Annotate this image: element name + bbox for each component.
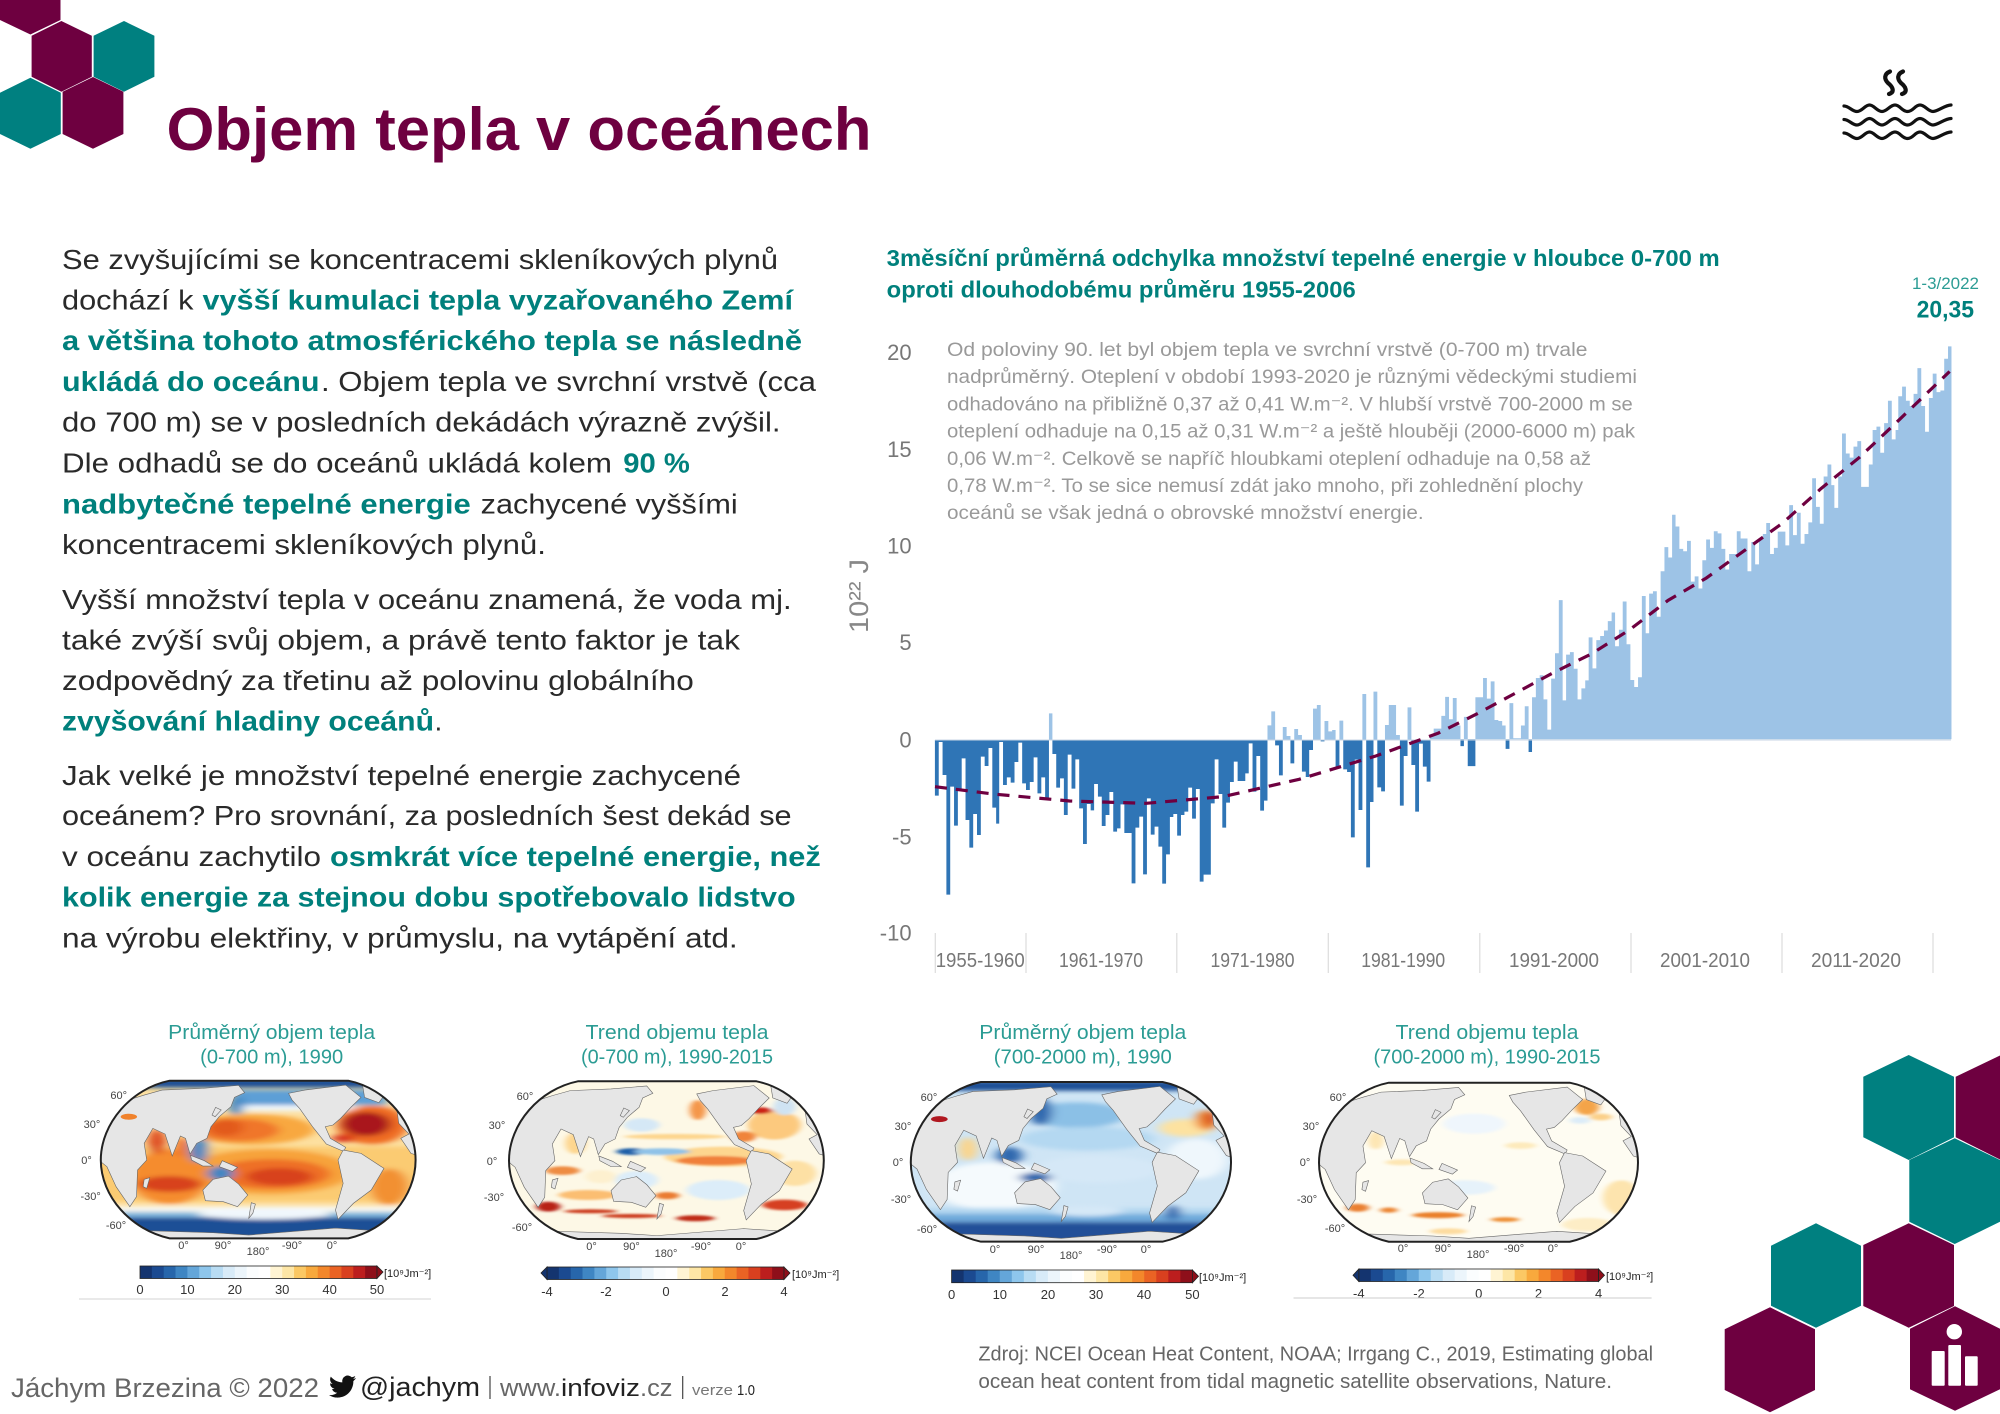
colour scale: 10 [993,1287,1007,1302]
text block: paragraph 1: . Objem tepla ve svrchní vrstvě (cca [321,366,816,397]
map axis labels: 0° [1300,1157,1310,1169]
x axis ticks and labels: 2001-2010 [1660,950,1750,972]
map axis labels: 180° [1467,1249,1489,1261]
source note: Zdroj: NCEI Ocean Heat Content, NOAA; Irrgang C., 2019, Estimating global [978,1344,1653,1366]
colour scale: 0 [662,1284,670,1299]
footer credits: verze [692,1382,733,1399]
colour scale: [10⁹Jm⁻²] [384,1268,431,1280]
map axis labels: 0° [487,1156,497,1168]
map axis labels: 180° [247,1246,269,1258]
text block: paragraph 3: v oceánu zachytilo [62,841,321,872]
text block: paragraph 1: Se zvyšujícími se koncentracemi skleníkových plynů [62,244,778,275]
colour scale: -4 [1353,1286,1365,1301]
icon: person bar chart [1932,1324,1978,1386]
map axis labels: -30° [80,1191,101,1203]
map axis labels [80,1090,337,1258]
colour scale [948,1270,1246,1302]
map axis labels: -90° [1504,1243,1524,1255]
map title: (700-2000 m), 1990 [994,1046,1172,1068]
text block: paragraph 2: . [434,706,442,737]
map title: Trend objemu tepla [586,1022,769,1044]
colour scale: 10 [180,1282,195,1297]
y axis labels: 0 [899,728,912,752]
colour scale: 50 [1185,1287,1200,1302]
x axis ticks and labels [935,933,1933,973]
x axis ticks and labels: 1955-1960 [936,950,1025,972]
text block: paragraph 3: kolik energie za stejnou dobu spotřebovalo lidstvo [62,882,796,913]
x axis ticks and labels: 1991-2000 [1509,950,1599,972]
map title: Trend objemu tepla [1396,1022,1579,1044]
chart annotation text [947,339,1637,524]
source note [978,1344,1653,1393]
x axis ticks and labels: 2011-2020 [1811,950,1901,972]
world map [100,1080,417,1240]
map panel 4: trend 700-2000 m [1297,1022,1653,1301]
map axis labels: -90° [691,1241,711,1253]
map axis labels: 60° [110,1090,127,1102]
y axis labels: 10 [887,534,912,558]
text block: paragraph 1: do 700 m) se v posledních dekádách výrazně zvýšil. [62,407,780,438]
map axis labels: 0° [893,1157,903,1169]
map title: (0-700 m), 1990-2015 [581,1046,773,1068]
callout: latest value: 1-3/2022 [1912,274,1979,293]
map axis labels [891,1092,1151,1262]
text block: paragraph 1: dochází k [62,284,195,316]
callout: latest value [1912,274,1979,324]
map axis labels: -90° [1097,1244,1117,1256]
map title [979,1022,1187,1068]
colour scale: 4 [780,1284,788,1299]
bar chart: ocean heat content anomaly [844,340,1951,973]
colour scale: 50 [370,1282,384,1297]
map axis labels: 90° [623,1241,640,1253]
source note: ocean heat content from tidal magnetic satellite observations, Nature. [978,1371,1612,1393]
map axis labels: 180° [655,1248,677,1260]
map axis labels: 60° [517,1091,533,1103]
footer credits: Jáchym Brzezina © 2022 [11,1373,319,1403]
y axis labels: 5 [899,630,912,655]
y axis unit: 10²² J [844,559,874,633]
text block: paragraph 1: 90 % [623,447,690,478]
positive anomaly bars [1430,346,1951,766]
text block: paragraph 2: zvyšování hladiny oceánů [62,706,434,737]
map axis labels: -30° [891,1194,911,1206]
text block: paragraph 2: zodpovědný za třetinu až polovinu globálního [62,665,694,696]
map axis labels: 30° [489,1120,505,1132]
map axis labels: -90° [282,1240,302,1252]
map title: Průměrný objem tepla [168,1022,376,1044]
map axis labels: 30° [895,1121,911,1133]
footer credits: .cz [640,1375,672,1402]
text block: paragraph 1 [62,244,816,560]
colour scale: 0 [136,1282,144,1297]
x axis ticks and labels: 1971-1980 [1210,950,1294,972]
map panel 3: average heat content 700-2000 m [891,1022,1246,1302]
y axis labels: 20 [887,340,912,365]
world map [910,1081,1232,1243]
map axis labels: 0° [990,1244,1000,1256]
colour scale: 0 [1475,1286,1482,1301]
colour scale [136,1266,431,1297]
x axis ticks and labels: 1961-1970 [1059,950,1143,972]
hexagon cluster: top left [0,0,154,149]
text block: paragraph 3: na výrobu elektřiny, v průmyslu, na vytápění atd. [62,923,738,954]
text block: paragraph 1: koncentracemi skleníkových plynů. [62,529,546,560]
trend curve: dashed [935,372,1950,803]
footer credits [11,1372,755,1403]
map title: (0-700 m), 1990 [200,1046,343,1068]
colour scale: 0 [948,1287,955,1302]
chart annotation text: 0,78 W.m⁻². To se sice nemusí zdát jako mnoho, při zohlednění plochy [947,475,1583,497]
colour scale: 20 [1041,1287,1055,1302]
map title [1374,1022,1600,1068]
map axis labels: 0° [178,1240,189,1252]
hexagon cluster: bottom right with chart icon [1725,1055,2000,1412]
colour scale: 40 [1137,1287,1151,1302]
colour scale: -2 [1413,1286,1425,1301]
y axis labels: 15 [887,437,912,462]
map axis labels: -60° [1325,1223,1345,1235]
map axis labels: 0° [81,1155,92,1167]
text block: paragraph 1: vyšší kumulaci tepla vyzařovaného Zemí [202,284,795,316]
colour scale: 30 [275,1282,289,1297]
text block: paragraph 3: osmkrát více tepelné energie, než [330,841,821,872]
text block: paragraph 2: také zvýší svůj objem, a právě tento faktor je tak [62,624,741,655]
x axis ticks and labels: 1981-1990 [1361,950,1445,972]
colour scale: [10⁹Jm⁻²] [792,1269,839,1281]
map axis labels [1297,1092,1558,1261]
chart heading [887,245,1720,302]
map axis labels: 0° [1398,1243,1408,1255]
chart annotation text: oceánů se však jedná o obrovské množství energie. [947,502,1424,524]
map axis labels: 90° [1435,1243,1451,1255]
colour scale: 2 [1535,1286,1542,1301]
map title: Průměrný objem tepla [979,1022,1187,1044]
colour scale: 2 [721,1284,729,1299]
text block: paragraph 3: Jak velké je množství tepelné energie zachycené [62,760,741,791]
map axis labels: -30° [1297,1194,1317,1206]
map title: (700-2000 m), 1990-2015 [1374,1046,1600,1068]
footer credits: www. [499,1375,561,1402]
colour scale: [10⁹Jm⁻²] [1606,1271,1653,1283]
chart annotation text: nadprůměrný. Oteplení v období 1993-2020 je různými vědeckými studiemi [947,366,1637,388]
colour scale: -2 [600,1284,612,1299]
icon: steam over waves [1844,72,1951,138]
map panel 2: trend 0-700 m [484,1022,839,1299]
y axis labels: -10 [880,920,912,946]
text block: paragraph 1: ukládá do oceánu [62,366,320,397]
text block: paragraph 3: oceánem? Pro srovnání, za posledních šest dekád se [62,800,792,831]
colour scale: 30 [1089,1287,1103,1302]
footer credits: 1.0 [737,1382,755,1399]
chart heading: 3měsíční průměrná odchylka množství tepelné energie v hloubce 0-700 m [887,245,1720,271]
y axis labels [880,340,912,946]
map axis labels: -30° [484,1192,504,1204]
map title [581,1022,773,1068]
map axis labels: 90° [215,1240,231,1252]
colour scale: [10⁹Jm⁻²] [1199,1272,1246,1284]
colour scale: 40 [322,1282,337,1297]
world map [1309,1083,1650,1250]
text block: paragraph 3 [62,760,821,954]
map axis labels: 60° [1330,1092,1346,1104]
world map [499,1081,836,1247]
footer credits: @jachym [360,1372,480,1402]
map axis labels: 0° [327,1240,337,1252]
colour scale: 20 [228,1282,242,1297]
text block: paragraph 2 [62,584,792,737]
y axis labels: -5 [892,824,912,850]
map panel 1: average heat content 0-700 m [80,1022,431,1297]
colour scale [1353,1269,1653,1301]
map axis labels: -60° [512,1222,532,1234]
chart annotation text: Od poloviny 90. let byl objem tepla ve svrchní vrstvě (0-700 m) trvale [947,339,1588,361]
text block: paragraph 1: Dle odhadů se do oceánů ukládá kolem [62,447,612,478]
chart annotation text: oteplení odhaduje na 0,15 až 0,31 W.m⁻² a ještě hlouběji (2000-6000 m) pak [947,421,1635,443]
map axis labels: 30° [1303,1121,1319,1133]
title: Objem tepla v oceánech [166,96,872,163]
icon: twitter bird [329,1376,356,1398]
footer credits: infoviz [561,1375,640,1402]
chart annotation text: 0,06 W.m⁻². Celkově se napříč hloubkami oteplení odhaduje na 0,58 až [947,448,1591,470]
map axis labels: 0° [1548,1243,1558,1255]
text block: paragraph 1: nadbytečné tepelné energie [62,488,471,519]
map axis labels: 90° [1028,1244,1044,1256]
map axis labels: 0° [586,1241,597,1253]
map axis labels: 180° [1060,1250,1082,1262]
text block: paragraph 1: zachycené vyššími [481,488,738,519]
text block: paragraph 2: Vyšší množství tepla v oceánu znamená, že voda mj. [62,584,792,615]
map axis labels: 0° [1141,1244,1151,1256]
colour scale: 4 [1595,1286,1602,1301]
map axis labels: -60° [106,1220,126,1232]
map axis labels: 30° [84,1119,100,1131]
chart annotation text: odhadováno na přibližně 0,37 až 0,41 W.m⁻². V hlubší vrstvě 700-2000 m se [947,393,1633,415]
colour scale: -4 [541,1284,553,1299]
map axis labels: 60° [921,1092,937,1104]
map axis labels: 0° [736,1241,746,1253]
callout: latest value: 20,35 [1917,296,1974,324]
chart heading: oproti dlouhodobému průměru 1955-2006 [887,276,1356,302]
map title [168,1022,376,1068]
colour scale [541,1267,839,1299]
negative anomaly bars [935,692,1431,895]
text block: paragraph 1: a většina tohoto atmosférického tepla se následně [62,325,802,356]
map axis labels: -60° [917,1224,937,1236]
map axis labels [484,1091,746,1260]
